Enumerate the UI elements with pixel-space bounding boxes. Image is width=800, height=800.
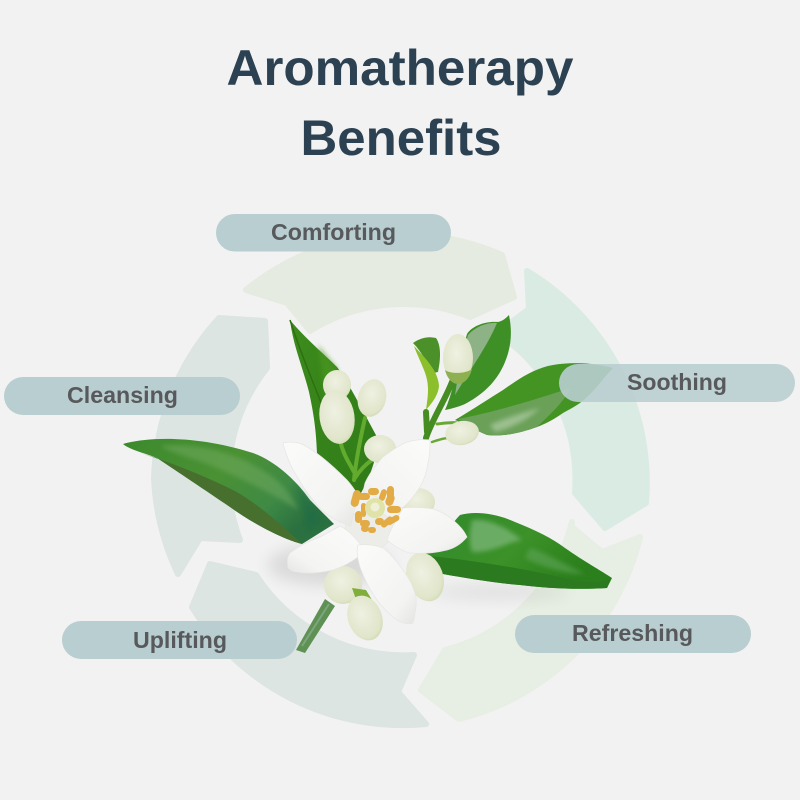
- orange blossom illustration: [123, 315, 613, 653]
- pill: uplifting: Uplifting: [133, 627, 227, 653]
- leaf: small curled: [413, 337, 440, 410]
- leaf: large left: [123, 439, 334, 544]
- pill: soothing: [559, 364, 795, 402]
- bud: bottom: [341, 588, 389, 645]
- bud: behind petal: [364, 435, 396, 463]
- leaf: top right: [445, 315, 511, 410]
- stamens: [350, 486, 401, 533]
- pill: comforting: Comforting: [271, 219, 396, 245]
- pill: cleansing: Cleansing: [67, 382, 178, 408]
- petal: upper right: [363, 440, 430, 508]
- buds: [316, 334, 481, 645]
- flower shadow: [268, 545, 392, 585]
- leaf shadow: [430, 584, 570, 600]
- bud: top right: [443, 334, 473, 384]
- pistil centre: [370, 502, 380, 512]
- leaf: lower right: [415, 513, 612, 589]
- pill: soothing: Soothing: [627, 369, 727, 395]
- bud: back left: [323, 370, 351, 400]
- leaf: upper right long: [455, 363, 613, 436]
- arrow: comforting segment: [246, 234, 514, 331]
- bud: large left: [316, 388, 358, 446]
- main stem: [296, 599, 335, 653]
- arrow: uplifting segment: [192, 564, 426, 725]
- pill: uplifting: [62, 621, 297, 659]
- bud: side right: [443, 418, 481, 448]
- bud: right of flower: [401, 488, 435, 516]
- pill: refreshing: Refreshing: [572, 620, 693, 646]
- arrow: soothing segment: [497, 271, 647, 528]
- arrow: cleansing segment: [154, 318, 267, 574]
- bud: lower left: [324, 566, 362, 604]
- cycle of arrows: [154, 234, 647, 725]
- bud: upper centre: [354, 376, 390, 420]
- flower cup: [345, 510, 393, 550]
- blossom petals: [283, 440, 467, 624]
- title: Benefits: [300, 110, 502, 166]
- petal: left: [287, 526, 361, 573]
- pistil: [365, 498, 385, 518]
- bud: lower right: [400, 547, 450, 607]
- petal: right: [387, 507, 467, 553]
- stems: [340, 382, 458, 480]
- arrow: refreshing segment: [421, 522, 640, 719]
- title: Aromatherapy: [226, 40, 574, 96]
- petal: upper left: [283, 442, 358, 526]
- pill: refreshing: [515, 615, 751, 653]
- pill: cleansing: [4, 377, 240, 415]
- pill: comforting: [216, 214, 451, 252]
- leaf: back upright: [290, 320, 377, 495]
- title: [226, 40, 574, 166]
- petal: bottom: [357, 545, 416, 624]
